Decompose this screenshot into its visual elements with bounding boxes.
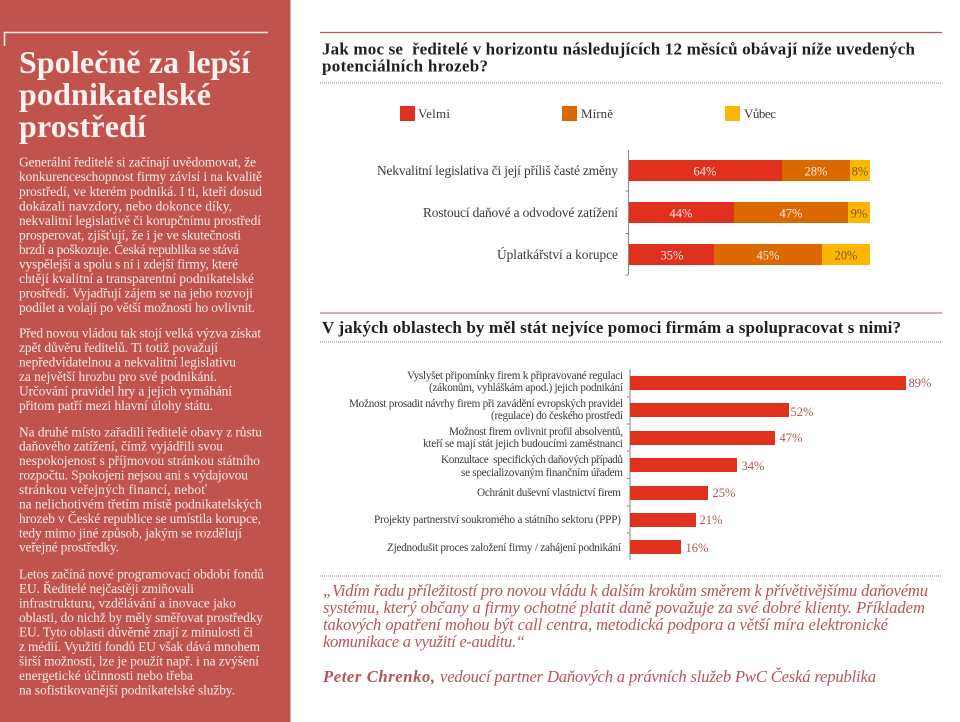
legend: Mírně (581, 106, 613, 121)
row: starting a business: Zjednodušit proces založení firmy / zahájení podnikání (387, 542, 621, 554)
row: graduates (423, 426, 802, 450)
sidebar paragraph 1: nekvalitní legislativě či korupčnímu prostředí (19, 213, 261, 228)
row: taxes (423, 202, 870, 223)
heading: threats question (320, 32, 942, 83)
sidebar paragraph 4: energetické účinnosti nebo třeba (19, 668, 193, 683)
row: graduates: kteří se mají stát jejich budoucími zaměstnanci (423, 438, 623, 450)
sidebar paragraph 1: brzdí a poškozuje. Česká republika se stává (19, 242, 239, 257)
row: taxes: 9% (851, 206, 867, 220)
sidebar title (19, 44, 251, 144)
sidebar paragraph 1 (19, 155, 262, 315)
sidebar paragraph 3: Na druhé místo zařadili ředitelé obavy z růstu (19, 424, 262, 439)
row: taxes: 44% (670, 206, 692, 220)
sidebar paragraph 4 (19, 566, 264, 697)
sidebar title: podnikatelské (19, 76, 211, 112)
sidebar paragraph 2: nepředvídatelnou a nekvalitní legislativu (19, 355, 236, 370)
sidebar paragraph 1: dokázali navzdory, nebo dokonce díky, (19, 198, 232, 213)
row: intellectual property: Ochránit duševní vlastnictví firem (477, 487, 621, 499)
quote: komunikace a využití e-auditu.“ (323, 632, 525, 651)
row: regulation comments: (zákonům, vyhláškám apod.) jejich podnikání (429, 382, 623, 394)
row: regulation comments: 89% (909, 376, 931, 390)
heading: threats question: Jak moc se ředitelé v horizontu následujících 12 měsíců obávají níže uvedených (322, 40, 916, 58)
sidebar paragraph 4: oblasti, do nichž by měly směřovat prostředky (19, 610, 263, 625)
row: corruption: 35% (661, 248, 683, 262)
sidebar paragraph 2: přitom patří mezi hlavní úlohy státu. (19, 398, 213, 413)
row: european rules (349, 398, 813, 422)
row: intellectual property (477, 486, 735, 500)
row: PPP: 21% (700, 513, 722, 527)
sidebar paragraph 1: vyspělejší a spolu s ní i zdejší firmy, které (19, 256, 238, 271)
row: taxes: Rostoucí daňové a odvodové zatížení (423, 205, 618, 220)
sidebar title: Společně za lepší (19, 44, 251, 80)
sidebar paragraph 4: EU. Tyto oblasti důvěrně znají z minulosti či (19, 624, 253, 639)
bar chart: state support areas (349, 369, 931, 560)
sidebar paragraph 4: širší možnosti, lze je použít např. i na zvýšení (19, 653, 259, 668)
sidebar paragraph 2: Určování pravidel hry a jejich vymáhání (19, 384, 232, 399)
row: legislation: 64% (694, 164, 716, 178)
sidebar paragraph 3: na nelichotivém třetím místě podnikatelských (19, 496, 262, 512)
quote: systému, který občany a firmy ochotné platit daně považuje za své dobré klienty. Příkladem (323, 598, 925, 617)
sidebar paragraph 3: stránkou veřejných financí, neboť (19, 482, 207, 497)
sidebar paragraph 4: infrastrukturu, vzdělávání a inovace jako (19, 595, 236, 610)
row: PPP: Projekty partnerství soukromého a státního sektoru (PPP) (374, 514, 621, 526)
stacked bar chart: threats (377, 150, 870, 275)
sidebar title: prostředí (19, 108, 147, 144)
sidebar paragraph 3: daňového zatížení, čímž vyjádřili svou (19, 439, 223, 454)
sidebar paragraph 1: Generální ředitelé si začínají uvědomovat, že (19, 155, 256, 170)
row: legislation (377, 160, 870, 181)
sidebar paragraph 3: veřejné prostředky. (19, 540, 119, 555)
row: tax consultation: Konzultace specifických daňových případů (441, 454, 623, 466)
row: tax consultation: 34% (742, 459, 764, 473)
sidebar paragraph 2 (19, 326, 261, 413)
sidebar paragraph 1: chtějí kvalitní a transparentní podnikatelské (19, 271, 254, 286)
row: regulation comments (407, 370, 931, 394)
quote attribution: vedoucí partner Daňových a právních služeb PwC Česká republika (440, 667, 876, 686)
row: legislation: 8% (852, 164, 868, 178)
row: legislation: Nekvalitní legislativa či její příliš časté změny (377, 163, 618, 178)
sidebar paragraph 4: Letos začíná nové programovací období fondů (19, 566, 264, 581)
sidebar paragraph 3: tedy mimo jiné způsob, jakým se rozdělují (19, 525, 242, 540)
row: intellectual property: 25% (713, 486, 735, 500)
legend: Velmi (418, 106, 450, 121)
sidebar paragraph 1: prostředí. Vyjadřují zájem se na jeho rozvoji (19, 286, 253, 300)
legend: Vůbec (744, 106, 776, 121)
sidebar paragraph 2: za největší hrozbu pro své podnikání. (19, 369, 217, 384)
sidebar paragraph 1: konkurenceschopnost firmy závisí i na kvalitě (19, 169, 262, 184)
sidebar paragraph 3 (19, 424, 262, 555)
sidebar paragraph 1: podílet a volají po větší možnosti ho ovlivnit. (19, 300, 255, 315)
sidebar paragraph 3: hrozeb v České republice se umístila korupce, (19, 511, 261, 526)
quote: „Vidím řadu příležitostí pro novou vládu k dalším krokům směrem k přívětivějšímu daňovému (323, 581, 928, 600)
row: corruption (497, 244, 870, 265)
quote: takových opatření mohou být call centra, metodická podpora a větší míra elektronické (323, 615, 889, 634)
sidebar paragraph 2: zpět důvěru ředitelů. Ti totiž považují (19, 340, 218, 355)
sidebar paragraph 4: z médií. Využití fondů EU však dává mnohem (19, 639, 261, 654)
sidebar paragraph 1: prosperovat, zjišťují, že i je ve skutečnosti (19, 227, 241, 242)
row: legislation: 28% (805, 164, 827, 178)
sidebar paragraph 2: Před novou vládou tak stojí velká výzva získat (19, 326, 261, 341)
quote (320, 576, 942, 686)
row: european rules: 52% (791, 405, 813, 419)
sidebar paragraph 3: nespokojenost s příjmovou stránkou státního (19, 453, 260, 468)
row: starting a business: 16% (686, 541, 708, 555)
quote attribution: Peter Chrenko, (322, 667, 435, 686)
row: graduates: 47% (780, 431, 802, 445)
row: european rules: Možnost prosadit návrhy firem při zavádění evropských pravidel (349, 398, 623, 410)
row: regulation comments: Vyslyšet připomínky firem k připravované regulaci (407, 370, 623, 382)
sidebar paragraph 4: na sofistikovanější podnikatelské služby. (19, 682, 235, 697)
row: european rules: (regulace) do českého prostředí (491, 410, 623, 422)
row: tax consultation: se specializovaným finančním úřadem (461, 467, 623, 479)
sidebar paragraph 1: prostředí, ve kterém podniká. I ti, kteří dosud (19, 184, 262, 199)
row: taxes: 47% (780, 206, 802, 220)
row: PPP (374, 513, 722, 527)
row: tax consultation (441, 454, 764, 479)
row: corruption: 45% (757, 248, 779, 262)
heading: state support question: V jakých oblastech by měl stát nejvíce pomoci firmám a spolupracovat s nimi? (322, 318, 901, 337)
row: corruption: 20% (835, 248, 857, 262)
row: graduates: Možnost firem ovlivnit profil absolventů, (449, 426, 623, 438)
panel: sidebar (0, 0, 290, 722)
sidebar paragraph 3: rozpočtu. Spokojeni nejsou ani s výdajovou (19, 468, 248, 483)
sidebar paragraph 4: EU. Ředitelé nejčastěji zmiňovali (19, 581, 194, 596)
row: starting a business (387, 540, 708, 555)
heading: threats question: potenciálních hrozeb? (322, 56, 488, 76)
legend (400, 106, 776, 121)
row: corruption: Úplatkářství a korupce (497, 247, 618, 262)
